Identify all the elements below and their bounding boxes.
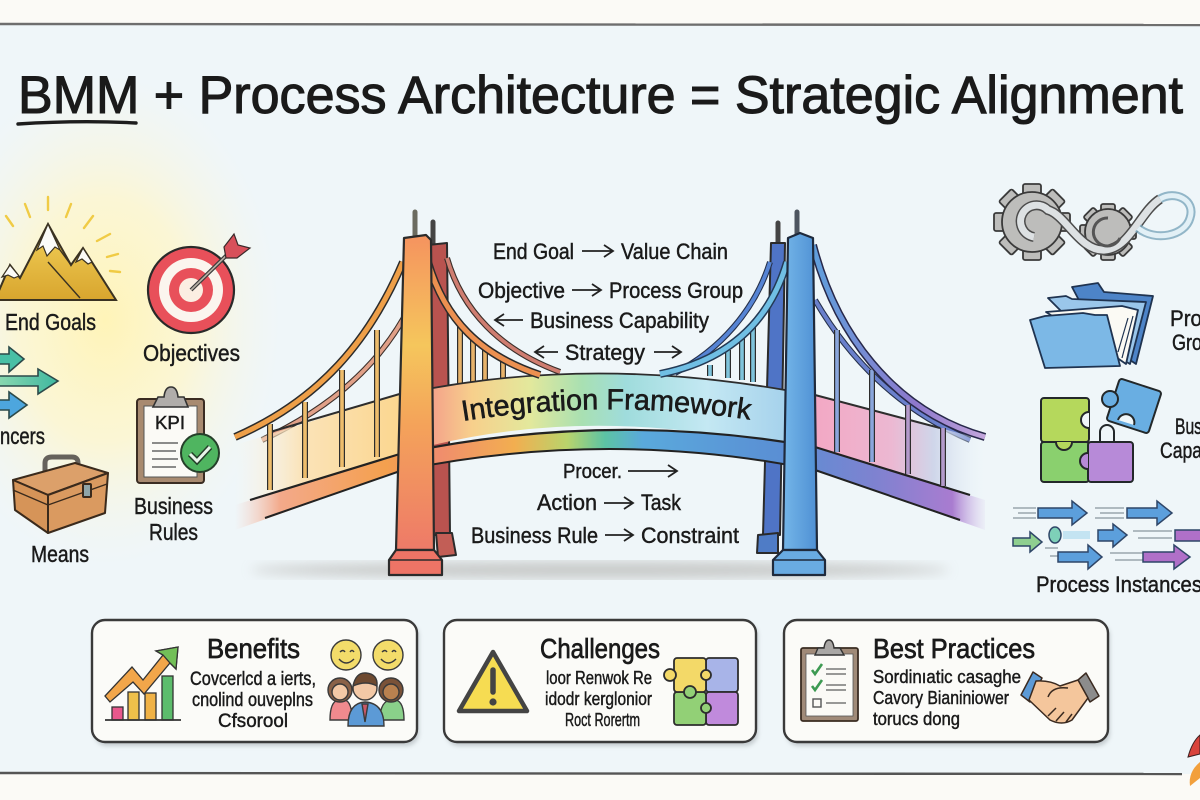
label: business rules: Rules [149, 519, 198, 545]
mapping list: lower: Procer. [563, 461, 622, 483]
label: process groups cropped [1170, 306, 1200, 355]
right deck [815, 395, 985, 500]
icon: target objectives [148, 234, 250, 333]
mapping list: lower: Action [537, 490, 597, 515]
front left tower [389, 212, 442, 575]
main cables [235, 245, 985, 437]
body text: best practices: torucs dong [873, 709, 960, 729]
mapping list: upper: Objective [478, 278, 565, 303]
icon: checklist clipboard [801, 640, 858, 721]
center hangers [460, 322, 753, 384]
icon: toolbox means [13, 457, 108, 533]
icon: rocket corner fragment [1188, 735, 1200, 786]
heading: benefits: Benefits [207, 633, 300, 664]
side hangers [270, 330, 943, 490]
icon: puzzle grid [664, 658, 738, 725]
mapping list: upper [478, 239, 743, 365]
icon: influencer arrows [0, 347, 58, 418]
back towers [428, 222, 785, 557]
icon: mountains end goals [0, 197, 120, 300]
label: business rules [134, 493, 213, 545]
body text: best practices: Cavory Bianiniower [873, 688, 1009, 708]
body text: challenges: Roct Rorertm [565, 710, 640, 730]
front right tower [773, 212, 825, 575]
lower beam [235, 430, 985, 530]
mapping list: lower: Business Rule [471, 523, 598, 548]
label: objectives: Objectives [143, 340, 240, 366]
icon: warning triangle [459, 652, 527, 711]
label: capability cropped [1160, 414, 1200, 463]
icon: gears with infinity ribbon [994, 184, 1191, 260]
body text: challenges: loor Renwok Re [546, 668, 652, 688]
mapping list: upper: Process Group [609, 278, 743, 303]
icon: capability puzzle [1041, 378, 1162, 482]
body text: benefits: cnolind ouveplns [192, 690, 313, 711]
panel: benefits [92, 620, 419, 746]
mapping list: upper: Value Chain [621, 239, 728, 264]
heading: best practices: Best Practices [873, 633, 1035, 664]
mapping list: lower: Constraint [641, 523, 739, 548]
title: BMM + Process Architecture = Strategic Alignment [18, 66, 1183, 125]
panel: challenges [444, 620, 758, 746]
back cables [262, 258, 970, 440]
icon: process group folders [1030, 283, 1153, 368]
ground shadow [250, 562, 950, 578]
heading: challenges: Challenges [540, 633, 660, 664]
body text: challenges [545, 668, 652, 730]
body text: benefits: Covcerlcd a ierts, [190, 669, 316, 690]
mapping list: upper: Business Capability [530, 308, 709, 333]
left deck [235, 393, 403, 505]
icon: process instance arrows [1013, 501, 1200, 569]
icon: growth bar chart [105, 647, 181, 720]
icon: KPI clipboard [137, 387, 219, 483]
label: end goals: End Goals [5, 309, 96, 335]
center deck band [433, 373, 785, 448]
mapping list: lower [471, 461, 739, 548]
body text: benefits [190, 669, 316, 732]
text: integration framework label: Integration Framework [462, 389, 752, 421]
label: business rules: Business [134, 493, 213, 519]
mapping list: upper: Strategy [565, 340, 645, 365]
body text: benefits: Cfsorool [218, 711, 288, 732]
mapping list: lower: Task [641, 490, 682, 515]
label: influencers cropped: ncers [0, 423, 45, 449]
body text: challenges: idodr kerglonior [545, 689, 652, 709]
body text: best practices [873, 667, 1021, 729]
body text: best practices: Sordinıatic casaghe [873, 667, 1021, 687]
mapping list: upper: End Goal [493, 239, 574, 264]
icon: happy people [328, 640, 404, 726]
icon: handshake [1021, 672, 1099, 723]
panel: best practices [784, 620, 1110, 746]
chart: rainbow suspension bridge [235, 212, 985, 575]
icon: KPI clipboard: KPI [155, 413, 185, 433]
label: means: Means [31, 541, 89, 567]
